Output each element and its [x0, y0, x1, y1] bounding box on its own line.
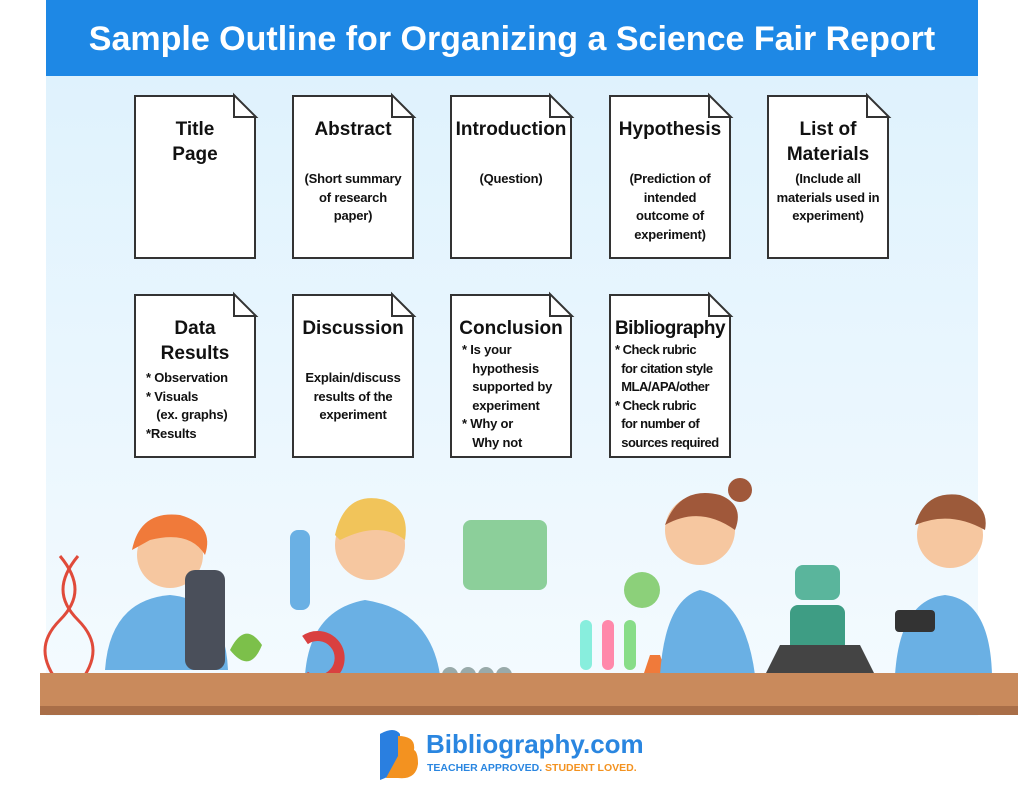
scientist 1 [105, 514, 262, 670]
card: bibliography: for citation style [621, 360, 713, 376]
card: discussion: Explain/discuss [305, 370, 401, 385]
scientist 4 [895, 494, 992, 675]
card: title page: Page [172, 144, 218, 165]
card: data results: (ex. graphs) [156, 407, 228, 422]
card: introduction: Introduction [456, 119, 566, 140]
card: abstract [292, 95, 414, 259]
card: conclusion: experiment [472, 398, 540, 412]
card: hypothesis: intended [644, 190, 696, 204]
scientist 2 [290, 498, 547, 686]
card: hypothesis: experiment) [634, 226, 706, 242]
card: discussion [292, 294, 414, 458]
scientist 3 [624, 478, 755, 675]
test tubes [574, 620, 670, 685]
card: list of materials: experiment) [792, 208, 864, 223]
title [46, 0, 978, 76]
card: bibliography [609, 294, 731, 458]
card: bibliography: * Check rubric [615, 398, 696, 412]
title: Sample Outline for Organizing a Science Fair Report [89, 20, 935, 58]
card: title page: Title [176, 119, 214, 140]
card: conclusion: Why not [472, 434, 522, 450]
logo: bibliography.com [380, 729, 644, 780]
card: bibliography: Bibliography [615, 318, 725, 339]
card: list of materials: (Include all [795, 171, 861, 186]
card: bibliography: * Check rubric [615, 342, 696, 357]
card: conclusion: supported by [472, 379, 552, 394]
card: discussion: results of the [314, 388, 392, 404]
logo: bibliography.com: Bibliography.com [426, 729, 644, 759]
card: hypothesis: (Prediction of [630, 171, 710, 186]
card: hypothesis [609, 95, 731, 259]
card: hypothesis: outcome of [636, 208, 704, 223]
logo: bibliography.com: TEACHER APPROVED. STUDENT LOVED. [427, 762, 637, 774]
card: abstract: Abstract [314, 119, 392, 140]
card: conclusion [450, 294, 572, 458]
card: title page [134, 95, 256, 259]
card: hypothesis: Hypothesis [619, 119, 721, 140]
card: data results: *Results [146, 426, 196, 440]
card: data results: Data [174, 318, 216, 339]
card: data results: * Visuals [146, 388, 198, 404]
card: discussion: Discussion [302, 318, 404, 339]
robot [760, 565, 880, 685]
card: conclusion: * Is your [462, 342, 512, 357]
card: list of materials: materials used in [777, 190, 879, 204]
card: list of materials: Materials [787, 144, 869, 165]
card: introduction [450, 95, 572, 259]
card: conclusion: Conclusion [459, 318, 563, 339]
icon: dna [45, 556, 93, 685]
card: bibliography: MLA/APA/other [621, 379, 709, 394]
card: conclusion: hypothesis [472, 360, 539, 376]
card: list of materials: List of [800, 119, 856, 140]
illustration: scientists and lab table [40, 478, 1018, 715]
card: introduction: (Question) [480, 171, 542, 186]
card: data results [134, 294, 256, 458]
card: data results: * Observation [146, 370, 228, 385]
card: bibliography: for number of [621, 416, 699, 431]
card: abstract: of research [319, 190, 387, 204]
card: conclusion: * Why or [462, 416, 513, 431]
card: data results: Results [161, 343, 229, 364]
card: bibliography: sources required [621, 434, 719, 450]
card: abstract: (Short summary [305, 171, 401, 186]
card: list of materials [767, 95, 889, 259]
card: discussion: experiment [319, 407, 387, 422]
card: abstract: paper) [334, 208, 372, 223]
icon: B logo [380, 730, 418, 780]
table [40, 673, 1018, 715]
